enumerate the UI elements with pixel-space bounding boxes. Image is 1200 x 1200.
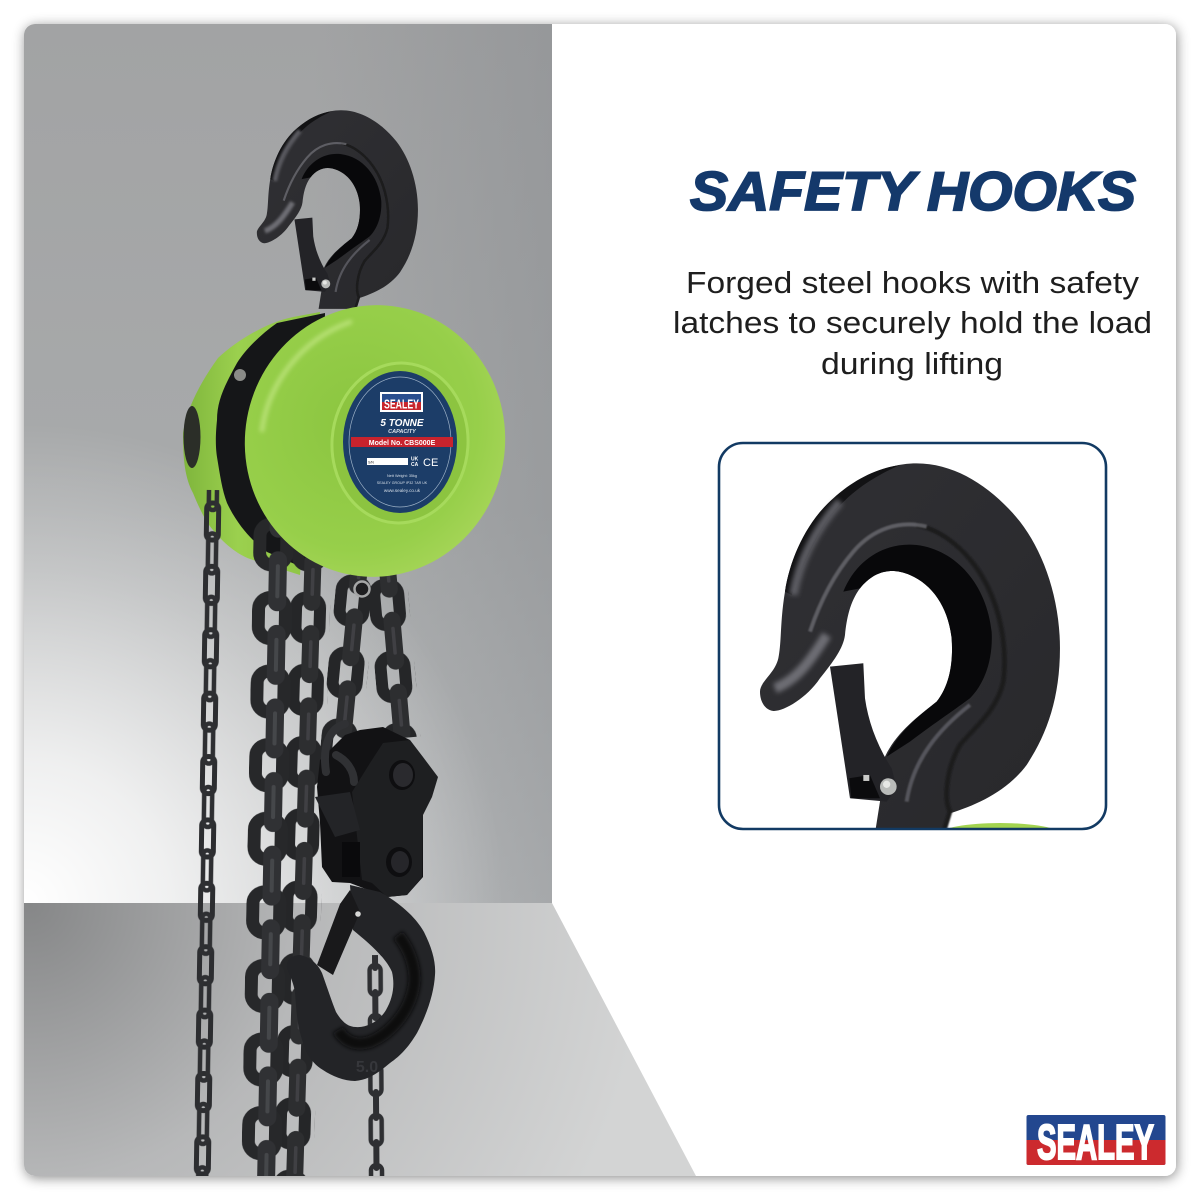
description text: during lifting bbox=[821, 347, 1003, 381]
badge capacity: CAPACITY bbox=[388, 429, 417, 435]
badge logo bbox=[380, 392, 423, 412]
lower hook stamp: 5.0 bbox=[356, 1059, 378, 1076]
description text: Forged steel hooks with safety bbox=[686, 266, 1140, 300]
product badge bbox=[343, 371, 457, 513]
belt bolt bbox=[234, 369, 246, 381]
badge model band: Model No. CBS000E bbox=[369, 440, 436, 447]
thin hand chain right bbox=[367, 955, 384, 1176]
block link bbox=[325, 724, 354, 782]
pulley block bbox=[315, 724, 438, 897]
serial box and marks: CE bbox=[423, 457, 438, 469]
badge logo: SEALEY bbox=[384, 398, 419, 412]
right chain to block bbox=[370, 574, 421, 738]
badge capacity bbox=[380, 419, 424, 433]
thin hand chain left bbox=[192, 490, 223, 1180]
badge footer: SEALEY GROUP IP32 7AR UK bbox=[377, 481, 428, 485]
floor bbox=[24, 903, 696, 1176]
description text bbox=[673, 266, 1152, 381]
title bbox=[690, 160, 1136, 222]
serial box and marks: CA bbox=[411, 462, 419, 468]
badge footer bbox=[377, 474, 428, 493]
description text: latches to securely hold the load bbox=[673, 306, 1152, 340]
badge footer: Nett Weight: 35kg bbox=[387, 474, 417, 478]
drum side slot bbox=[184, 406, 200, 468]
sheave axle under drum bbox=[354, 582, 370, 596]
wall backdrop bbox=[24, 24, 552, 904]
serial box and marks: S/N bbox=[368, 460, 374, 464]
title: SAFETY bbox=[690, 160, 919, 222]
block bolts bbox=[386, 760, 415, 877]
badge model band bbox=[351, 437, 453, 447]
badge capacity: 5 TONNE bbox=[380, 418, 424, 429]
top hook bbox=[257, 110, 418, 309]
raised boss bbox=[327, 358, 473, 528]
serial box and marks: UK bbox=[411, 456, 419, 462]
lower hook bbox=[287, 885, 435, 1081]
black drum belt bbox=[216, 313, 325, 575]
hoist front drum bbox=[244, 305, 506, 577]
inset panel: hook close-up bbox=[719, 443, 1106, 845]
serial box and marks bbox=[367, 456, 438, 466]
title: HOOKS bbox=[927, 160, 1136, 222]
rear load chain bbox=[276, 548, 330, 1176]
centre chain to block bbox=[320, 574, 371, 752]
front load chain bbox=[242, 518, 292, 1176]
photo panel: wall, floor and chain hoist bbox=[24, 24, 696, 1198]
close-up hook bbox=[760, 463, 1060, 833]
badge footer: www.sealey.co.uk bbox=[384, 488, 421, 493]
hoist back drum bbox=[183, 312, 320, 575]
